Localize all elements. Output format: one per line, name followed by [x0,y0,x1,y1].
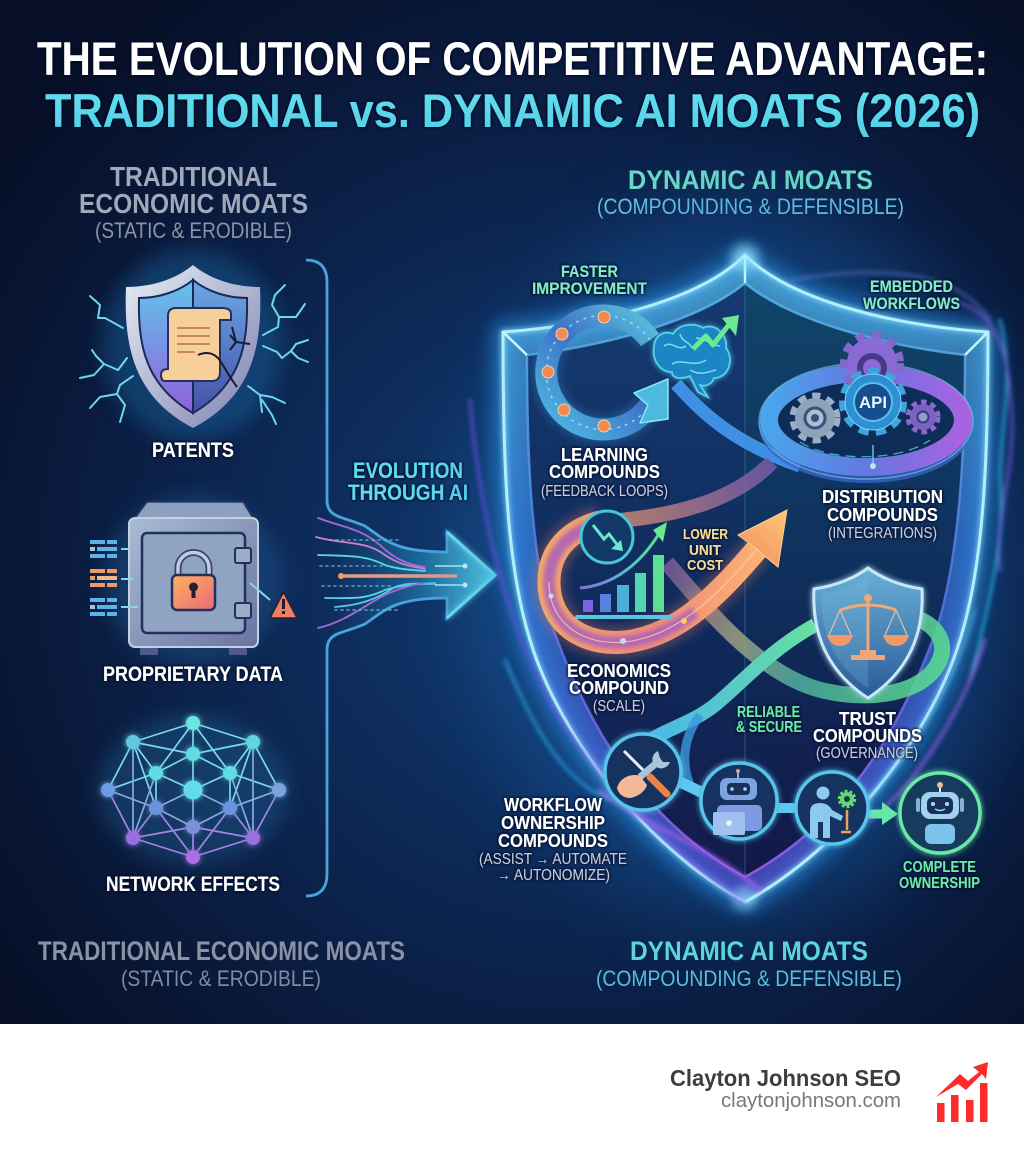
label: economics compound: (SCALE) [593,698,645,715]
title [37,32,988,137]
label: learning compounds: (FEEDBACK LOOPS) [541,483,668,500]
label: patents: PATENTS [152,439,234,462]
label: distribution compounds: (INTEGRATIONS) [828,525,937,542]
icon: grey gear [793,396,837,440]
panel: dynamic moat shield [465,200,1024,920]
label: distribution compounds: COMPOUNDS [827,505,938,525]
heading: dynamic ai moats [597,165,904,219]
caption: traditional economic moats [38,936,405,991]
label: lower unit cost: COST [687,558,723,574]
heading: traditional economic moats: ECONOMIC MOATS [79,188,308,219]
caption: dynamic ai moats: DYNAMIC AI MOATS [630,936,868,966]
label: network effects: NETWORK EFFECTS [106,873,280,896]
label: embedded workflows [863,278,960,313]
bracket and evolution arrow [306,260,495,896]
label: learning compounds: LEARNING [561,445,648,465]
label: workflow ownership compounds: → AUTONOMIZE) [497,867,610,884]
footer panel [0,1024,1024,1154]
label: trust compounds: COMPOUNDS [813,726,922,746]
icon: person with gear [796,772,868,844]
label: workflow ownership compounds: COMPOUNDS [498,831,608,851]
band: trust to workflow [636,625,815,785]
label: faster improvement [532,263,647,298]
icon: brain with growth arrow [654,315,739,397]
icon: purple top gear [844,335,900,391]
label: reliable and secure [736,704,802,736]
caption: dynamic ai moats: (COMPOUNDING & DEFENSIBLE) [596,966,902,991]
band: distribution ellipse with gears [759,335,973,479]
label: distribution compounds: DISTRIBUTION [822,487,943,507]
label: complete ownership: COMPLETE [903,859,976,876]
label: distribution compounds [822,487,943,542]
label: reliable and secure: & SECURE [736,719,802,736]
icon: falling cost badge [581,511,633,563]
icon: small purple gear [908,402,938,432]
icon: api gear: API [859,393,887,412]
label: economics compound: COMPOUND [569,678,669,698]
icon: red growth chart logo [936,1062,988,1122]
heading: dynamic ai moats: (COMPOUNDING & DEFENSIBLE) [597,194,904,219]
label: workflow ownership compounds: WORKFLOW [504,795,602,815]
label: faster improvement: IMPROVEMENT [532,280,647,298]
heading: dynamic ai moats: DYNAMIC AI MOATS [628,165,873,195]
footer brand text: claytonjohnson.com [721,1090,901,1112]
label: proprietary data: PROPRIETARY DATA [103,663,283,686]
loop: learning feedback ring [542,311,668,432]
label: lower unit cost: UNIT [689,543,721,559]
label: evolution through ai: THROUGH AI [348,480,468,505]
icon: api gear [843,372,903,432]
heading: traditional economic moats: (STATIC & ERODIBLE) [95,218,292,243]
band: ring to economics [578,462,772,530]
icon: trust shield with scales [814,568,922,698]
band: infinity link to distribution [676,384,800,466]
caption: traditional economic moats: (STATIC & ERODIBLE) [121,966,321,991]
icon: autonomous robot [900,773,980,853]
icon: network effects graph [98,715,288,865]
icon: proprietary data safe [90,495,297,665]
label: reliable and secure: RELIABLE [737,704,800,721]
label: complete ownership [899,859,980,892]
footer brand text: Clayton Johnson SEO [670,1065,901,1091]
icon: robot with laptop [701,763,777,839]
label: learning compounds [541,445,668,500]
caption: dynamic ai moats [596,936,902,991]
label: trust compounds: TRUST [839,709,896,729]
footer brand text [670,1065,901,1112]
label: trust compounds [813,709,922,762]
label: embedded workflows: WORKFLOWS [863,295,960,313]
label: complete ownership: OWNERSHIP [899,875,980,892]
label: learning compounds: COMPOUNDS [549,462,660,482]
label: workflow ownership compounds: (ASSIST → AUTOMATE [479,851,627,868]
label: workflow ownership compounds [479,795,627,884]
label: workflow ownership compounds: OWNERSHIP [501,813,605,833]
label: economics compound [567,661,671,715]
heading: traditional economic moats: TRADITIONAL [110,161,277,192]
band: economics loop with rising arrow [548,510,787,644]
label: evolution through ai: EVOLUTION [353,458,463,483]
label: faster improvement: FASTER [561,263,618,281]
label: economics compound: ECONOMICS [567,661,671,681]
band: economics to trust crossover [667,563,942,695]
icon: hand with tools [605,734,681,810]
label: evolution through ai [348,458,468,505]
label: lower unit cost [683,527,728,574]
caption: traditional economic moats: TRADITIONAL ECONOMIC MOATS [38,936,405,966]
label: lower unit cost: LOWER [683,527,728,543]
workflow progression [605,734,980,853]
label: trust compounds: (GOVERNANCE) [816,745,918,762]
icon: patents cracked shield [80,250,308,440]
chart: rising bars [575,522,673,619]
heading: traditional economic moats [79,161,308,243]
label: embedded workflows: EMBEDDED [870,278,953,296]
